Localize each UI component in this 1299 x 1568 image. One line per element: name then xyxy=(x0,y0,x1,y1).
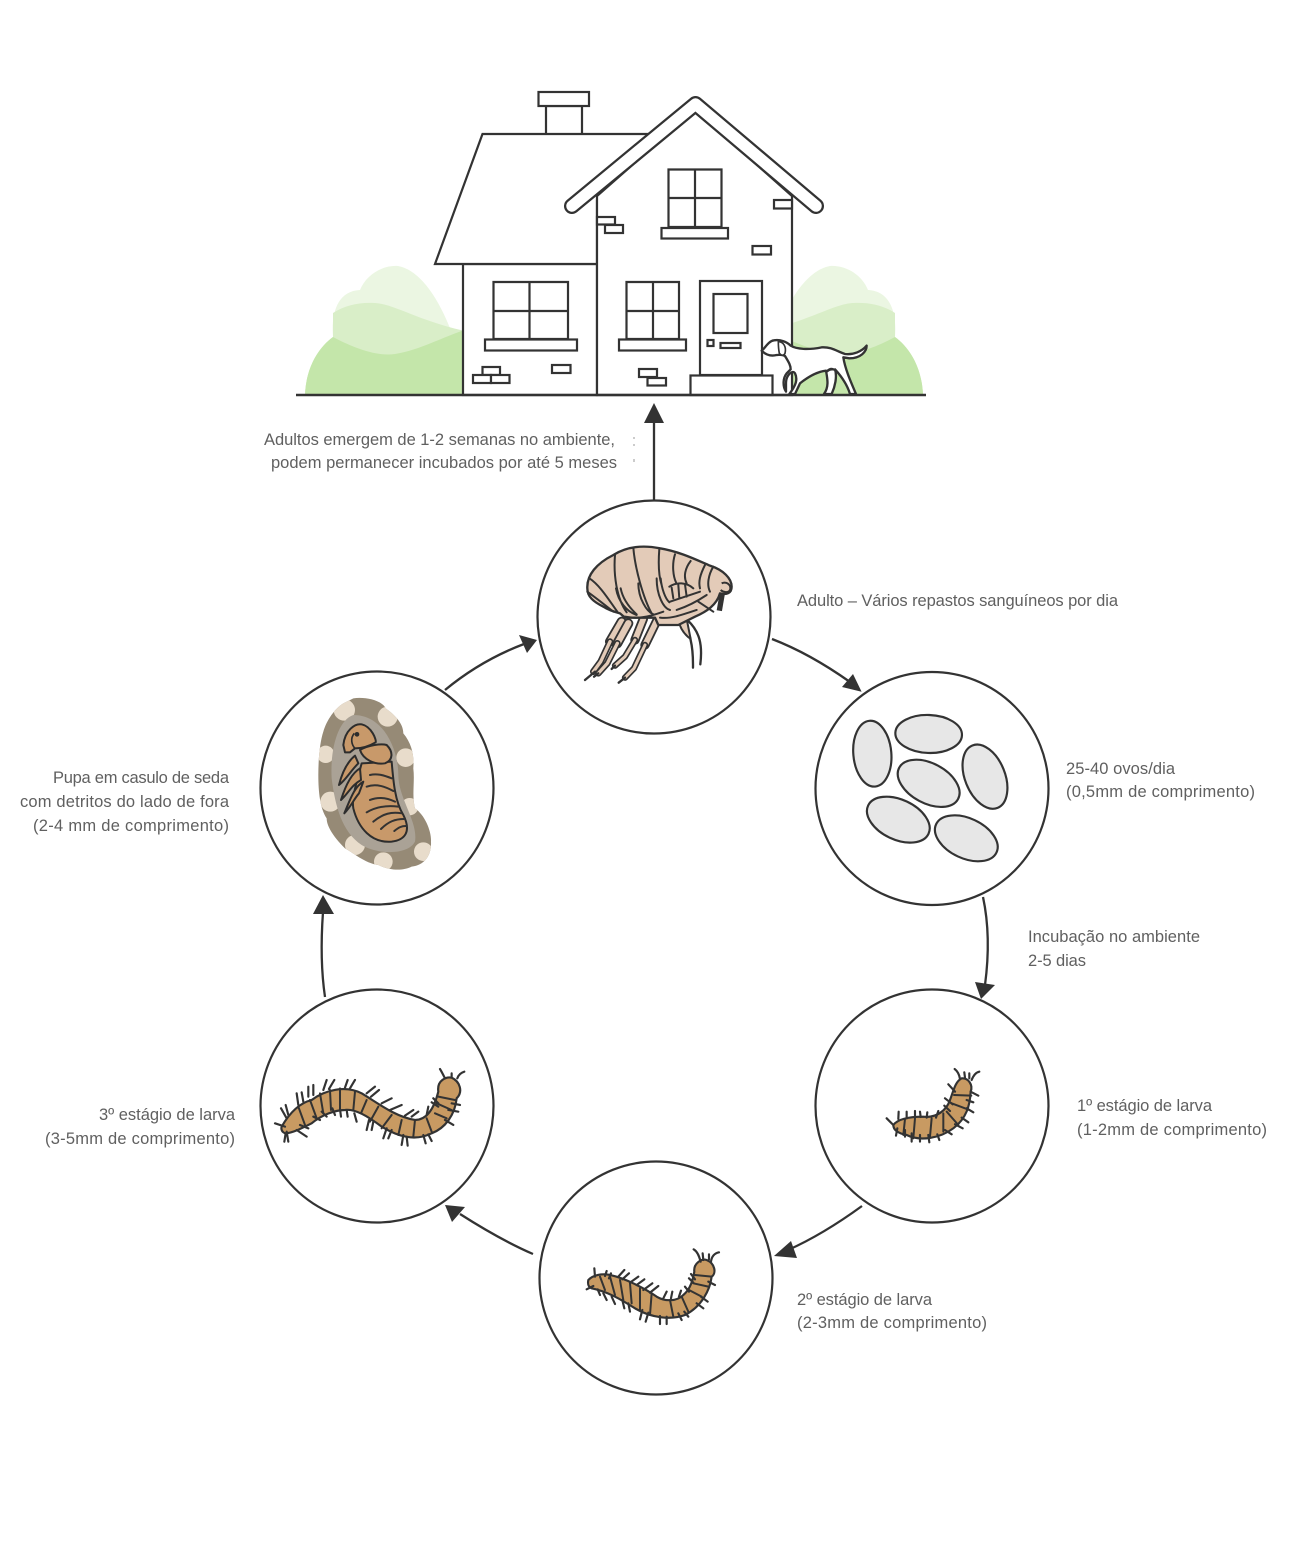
caption: adults emerge xyxy=(264,431,617,472)
caption: pupa: Pupa em casulo de seda xyxy=(53,769,230,787)
stage: eggs xyxy=(816,672,1048,905)
arrow: third larva to pupa xyxy=(313,895,334,997)
caption: incubation: Incubação no ambiente xyxy=(1028,928,1200,946)
side wing wall xyxy=(463,264,597,395)
gable roof xyxy=(572,104,816,206)
caption: first instar: 1º estágio de larva xyxy=(1077,1097,1213,1115)
caption: third instar xyxy=(45,1106,236,1148)
arrow: first to second larva xyxy=(774,1206,862,1258)
icon: dog xyxy=(762,340,867,394)
caption: second instar: 2º estágio de larva xyxy=(797,1291,933,1309)
middle window xyxy=(619,282,686,350)
caption: adults emerge: Adultos emergem de 1-2 semanas no ambiente, xyxy=(264,431,615,449)
bush: right xyxy=(758,266,923,395)
caption: incubation xyxy=(1028,928,1200,970)
stage: first instar larva xyxy=(816,990,1048,1222)
caption: incubation: 2-5 dias xyxy=(1028,952,1086,970)
bricks xyxy=(473,200,792,386)
caption: eggs xyxy=(1066,760,1255,801)
stage: second instar larva xyxy=(540,1162,772,1394)
arrow: second to third larva xyxy=(445,1205,533,1254)
left window xyxy=(485,282,577,350)
arrow: adult to eggs xyxy=(772,639,862,692)
caption: second instar: (2-3mm de comprimento) xyxy=(797,1314,987,1332)
stage: adult flea xyxy=(538,500,770,734)
upper window xyxy=(662,170,728,238)
caption: second instar xyxy=(797,1291,987,1332)
caption: eggs: (0,5mm de comprimento) xyxy=(1066,783,1255,801)
caption: pupa: (2-4 mm de comprimento) xyxy=(33,817,229,835)
stage: third instar larva xyxy=(260,990,494,1222)
arrow: eggs to first larva xyxy=(975,897,995,999)
house scene xyxy=(296,92,926,395)
caption: pupa: com detritos do lado de fora xyxy=(20,793,230,811)
caption: eggs: 25-40 ovos/dia xyxy=(1066,760,1176,778)
door xyxy=(690,281,772,395)
icon: flea xyxy=(585,547,732,683)
icon: pupa in cocoon xyxy=(317,698,433,871)
arrow: pupa to adult xyxy=(445,635,537,690)
caption: third instar: 3º estágio de larva xyxy=(99,1106,236,1124)
caption: third instar: (3-5mm de comprimento) xyxy=(45,1130,235,1148)
side wing roof xyxy=(435,134,650,264)
icon: medium larva xyxy=(587,1249,719,1324)
caption: adults emerge: podem permanecer incubados por até 5 meses xyxy=(271,454,617,472)
caption: first instar xyxy=(1077,1097,1267,1139)
main wall xyxy=(597,110,792,395)
bush: left xyxy=(305,266,470,395)
icon: small larva xyxy=(887,1069,979,1142)
caption: adult: Adulto – Vários repastos sanguíneos por dia xyxy=(797,592,1119,610)
icon: eggs xyxy=(851,714,1016,871)
chimney xyxy=(538,92,589,136)
arrow: flea to house xyxy=(644,403,664,501)
stage: pupa xyxy=(260,672,494,904)
caption: first instar: (1-2mm de comprimento) xyxy=(1077,1121,1267,1139)
caption: pupa xyxy=(20,769,230,835)
ground line xyxy=(296,394,926,396)
icon: large larva xyxy=(275,1069,464,1146)
